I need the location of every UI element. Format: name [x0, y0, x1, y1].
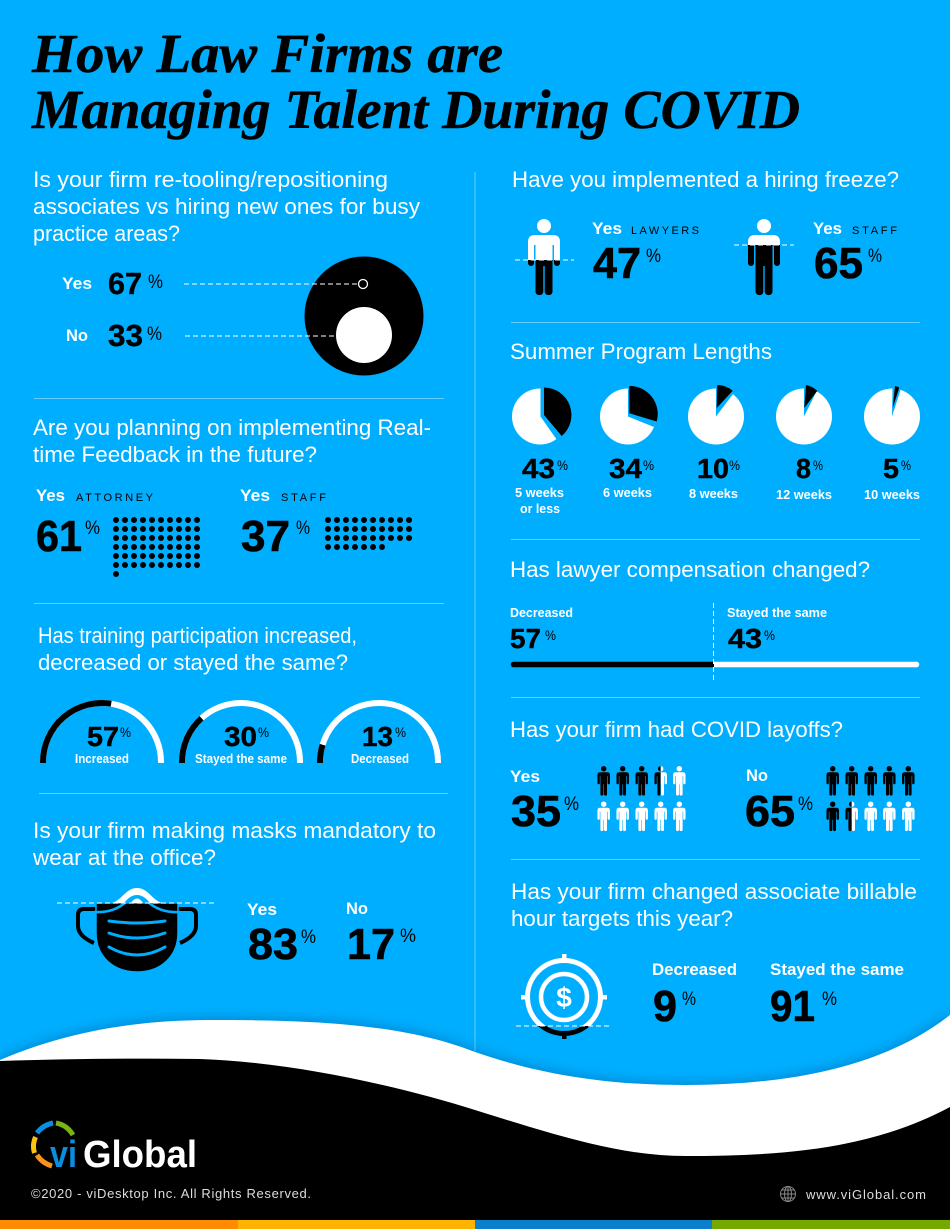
heading — [38, 623, 357, 675]
stat: no 33: % — [147, 324, 162, 345]
stat: staff 65: Yes — [813, 219, 842, 238]
stat: decreased 57: 57 — [510, 623, 541, 654]
pie: 5 percent: 10 weeks — [864, 487, 920, 502]
stat: attorney 61: Yes — [36, 486, 65, 505]
stat: no 17: No — [346, 899, 368, 918]
heading: wear at the office? — [32, 845, 216, 870]
website: www.viGlobal.com — [805, 1187, 926, 1202]
stat: decreased 9 — [652, 960, 737, 1031]
pie: 43 percent: % — [557, 457, 568, 473]
chart: nested circles — [184, 256, 424, 376]
footer waves — [0, 1015, 950, 1229]
stat: no 33 — [66, 318, 162, 353]
stat: attorney 61: % — [85, 518, 100, 539]
pie: 34 percent: 34 — [609, 453, 642, 484]
heading: Summer Program Lengths — [510, 339, 772, 364]
stat: attorney 61: 61 — [36, 512, 82, 561]
stat: yes 67 — [62, 266, 163, 301]
stat: staff 65 — [813, 219, 897, 288]
stat: no 65: 65 — [745, 787, 795, 836]
stat: attorney 61: ATTORNEY — [76, 492, 154, 504]
gauge: decreased 13 — [320, 703, 438, 766]
heading: practice areas? — [33, 221, 180, 246]
heading: Are you planning on implementing Real- — [33, 415, 431, 440]
gauge: decreased 13: Decreased — [351, 751, 409, 766]
stat: stayed the same 43 — [727, 605, 827, 654]
gauge: increased 57 — [43, 703, 161, 766]
stat: stayed the same 91 — [770, 960, 904, 1031]
heading — [511, 879, 917, 931]
stat: staff 37: STAFF — [281, 492, 326, 504]
stat: yes 67: Yes — [62, 274, 92, 293]
heading: associates vs hiring new ones for busy — [33, 194, 420, 219]
pie: 43 percent: 43 — [522, 453, 555, 484]
stat: staff 65: % — [868, 246, 882, 267]
pie: 43 percent — [512, 388, 571, 516]
stat: no 17: % — [400, 926, 416, 947]
heading: Is your firm making masks mandatory to — [33, 818, 436, 843]
stat: stayed the same 43: % — [764, 627, 775, 643]
pie: 10 percent — [688, 385, 744, 501]
pie: 10 percent: 8 weeks — [689, 486, 738, 501]
stat: lawyers 47: Yes — [592, 219, 622, 238]
panel: summer program lengths — [510, 339, 920, 516]
stat: yes 67: % — [148, 272, 163, 293]
icon: person lawyers — [515, 219, 574, 295]
gauge: decreased 13: 13 — [362, 721, 393, 752]
stat: no 65 — [745, 766, 813, 836]
panel: real-time feedback — [33, 415, 431, 574]
gauge: stayed the same 30: % — [258, 724, 269, 740]
stat: lawyers 47 — [592, 219, 699, 288]
heading: Have you implemented a hiring freeze? — [512, 167, 899, 192]
stat: no 33: 33 — [108, 318, 143, 353]
heading: decreased or stayed the same? — [38, 650, 348, 675]
stat: stayed the same 91: % — [822, 989, 837, 1010]
pie: 8 percent: 8 — [796, 453, 811, 484]
pie: 8 percent — [776, 385, 832, 502]
stat: staff 65: 65 — [814, 239, 863, 288]
title: How Law Firms are — [31, 23, 503, 84]
stat: stayed the same 91: 91 — [770, 982, 815, 1031]
heading — [32, 818, 436, 870]
pie: 10 percent: % — [729, 457, 740, 473]
stat: staff 37: % — [296, 518, 310, 539]
heading — [33, 167, 420, 246]
stat: yes 67: 67 — [108, 266, 142, 301]
stat: yes 83: 83 — [248, 920, 298, 969]
pie: 8 percent: 12 weeks — [776, 487, 832, 502]
stat: yes 83 — [247, 900, 316, 969]
stat: staff 65: STAFF — [852, 225, 897, 237]
stat: no 17 — [346, 899, 416, 969]
heading: time Feedback in the future? — [33, 442, 317, 467]
stat: yes 35: Yes — [510, 767, 540, 786]
logo: viGlobal: vi — [50, 1134, 77, 1176]
title: Managing Talent During COVID — [31, 79, 800, 140]
panel: covid layoffs — [510, 717, 915, 836]
title — [31, 23, 800, 140]
stat: attorney 61 — [36, 486, 154, 561]
stat: stayed the same 91: Stayed the same — [770, 960, 904, 979]
panel: re-tooling associates — [33, 167, 424, 376]
stat: stayed the same 43: 43 — [728, 623, 762, 654]
icon: face mask — [57, 888, 215, 972]
stat: no 17: 17 — [347, 920, 395, 969]
pie: 34 percent: % — [643, 457, 654, 473]
stat: staff 37: 37 — [241, 512, 290, 561]
icon: dollar target — [516, 954, 612, 1039]
pie: 43 percent: or less — [520, 501, 560, 516]
logo: viGlobal — [33, 1123, 197, 1176]
gauge: stayed the same 30: 30 — [224, 721, 257, 752]
stat: decreased 57: Decreased — [510, 605, 573, 620]
stat: lawyers 47: LAWYERS — [631, 225, 699, 237]
stat: decreased 9: 9 — [653, 982, 677, 1031]
pie: 8 percent: % — [813, 457, 823, 473]
heading: hour targets this year? — [511, 906, 733, 931]
gauge: increased 57: Increased — [75, 751, 129, 766]
pie: 10 percent: 10 — [697, 453, 729, 484]
stat: no 65: % — [798, 794, 813, 815]
gauge: decreased 13: % — [395, 724, 406, 740]
stat: decreased 57 — [510, 605, 573, 654]
heading: Has lawyer compensation changed? — [510, 557, 870, 582]
icon: dollar target: $ — [556, 982, 572, 1013]
panel: training participation — [38, 623, 438, 766]
gauge: stayed the same 30 — [182, 703, 300, 766]
colour bar — [0, 1220, 950, 1229]
stat: yes 83: Yes — [247, 900, 277, 919]
stat: no 65: No — [746, 766, 768, 785]
stat: decreased 57: % — [545, 627, 556, 643]
column divider — [474, 172, 476, 1056]
pie: 5 percent — [864, 386, 920, 502]
stat: stayed the same 43: Stayed the same — [727, 605, 827, 620]
heading — [33, 415, 431, 467]
pie: 43 percent: 5 weeks — [515, 485, 564, 500]
heading: Has your firm changed associate billable — [511, 879, 917, 904]
pie: 5 percent: 5 — [883, 453, 899, 484]
logo: viGlobal: Global — [83, 1134, 197, 1176]
stat: no 33: No — [66, 326, 88, 345]
copyright: ©2020 - viDesktop Inc. All Rights Reserved. — [31, 1186, 311, 1201]
pie: 34 percent: 6 weeks — [603, 485, 652, 500]
stat: lawyers 47: 47 — [593, 239, 641, 288]
gauge: increased 57: 57 — [87, 721, 119, 752]
panel: lawyer compensation — [510, 557, 916, 682]
heading: Has your firm had COVID layoffs? — [510, 717, 843, 742]
heading: Is your firm re-tooling/repositioning — [33, 167, 388, 192]
stat: staff 37 — [240, 486, 326, 561]
icon: globe — [780, 1186, 796, 1202]
panel: masks — [32, 818, 436, 972]
pie: 5 percent: % — [901, 457, 911, 473]
stat: lawyers 47: % — [646, 246, 661, 267]
chart: split bar — [514, 603, 916, 682]
gauge: increased 57: % — [120, 724, 131, 740]
chart: attorney dots — [116, 520, 198, 574]
heading: Has training participation increased, — [38, 623, 357, 648]
stat: yes 35: 35 — [511, 787, 561, 836]
chart: people no — [826, 766, 915, 831]
chart: people yes — [597, 766, 686, 831]
pie: 34 percent — [600, 386, 658, 500]
gauge: stayed the same 30: Stayed the same — [195, 751, 287, 766]
stat: decreased 9: Decreased — [652, 960, 737, 979]
stat: yes 83: % — [301, 927, 316, 948]
stat: yes 35 — [510, 767, 579, 836]
stat: decreased 9: % — [682, 989, 696, 1010]
stat: yes 35: % — [564, 794, 579, 815]
icon: person staff — [734, 219, 794, 295]
chart: staff dots — [328, 520, 410, 547]
panel: billable hour targets — [511, 879, 917, 1039]
stat: staff 37: Yes — [240, 486, 270, 505]
